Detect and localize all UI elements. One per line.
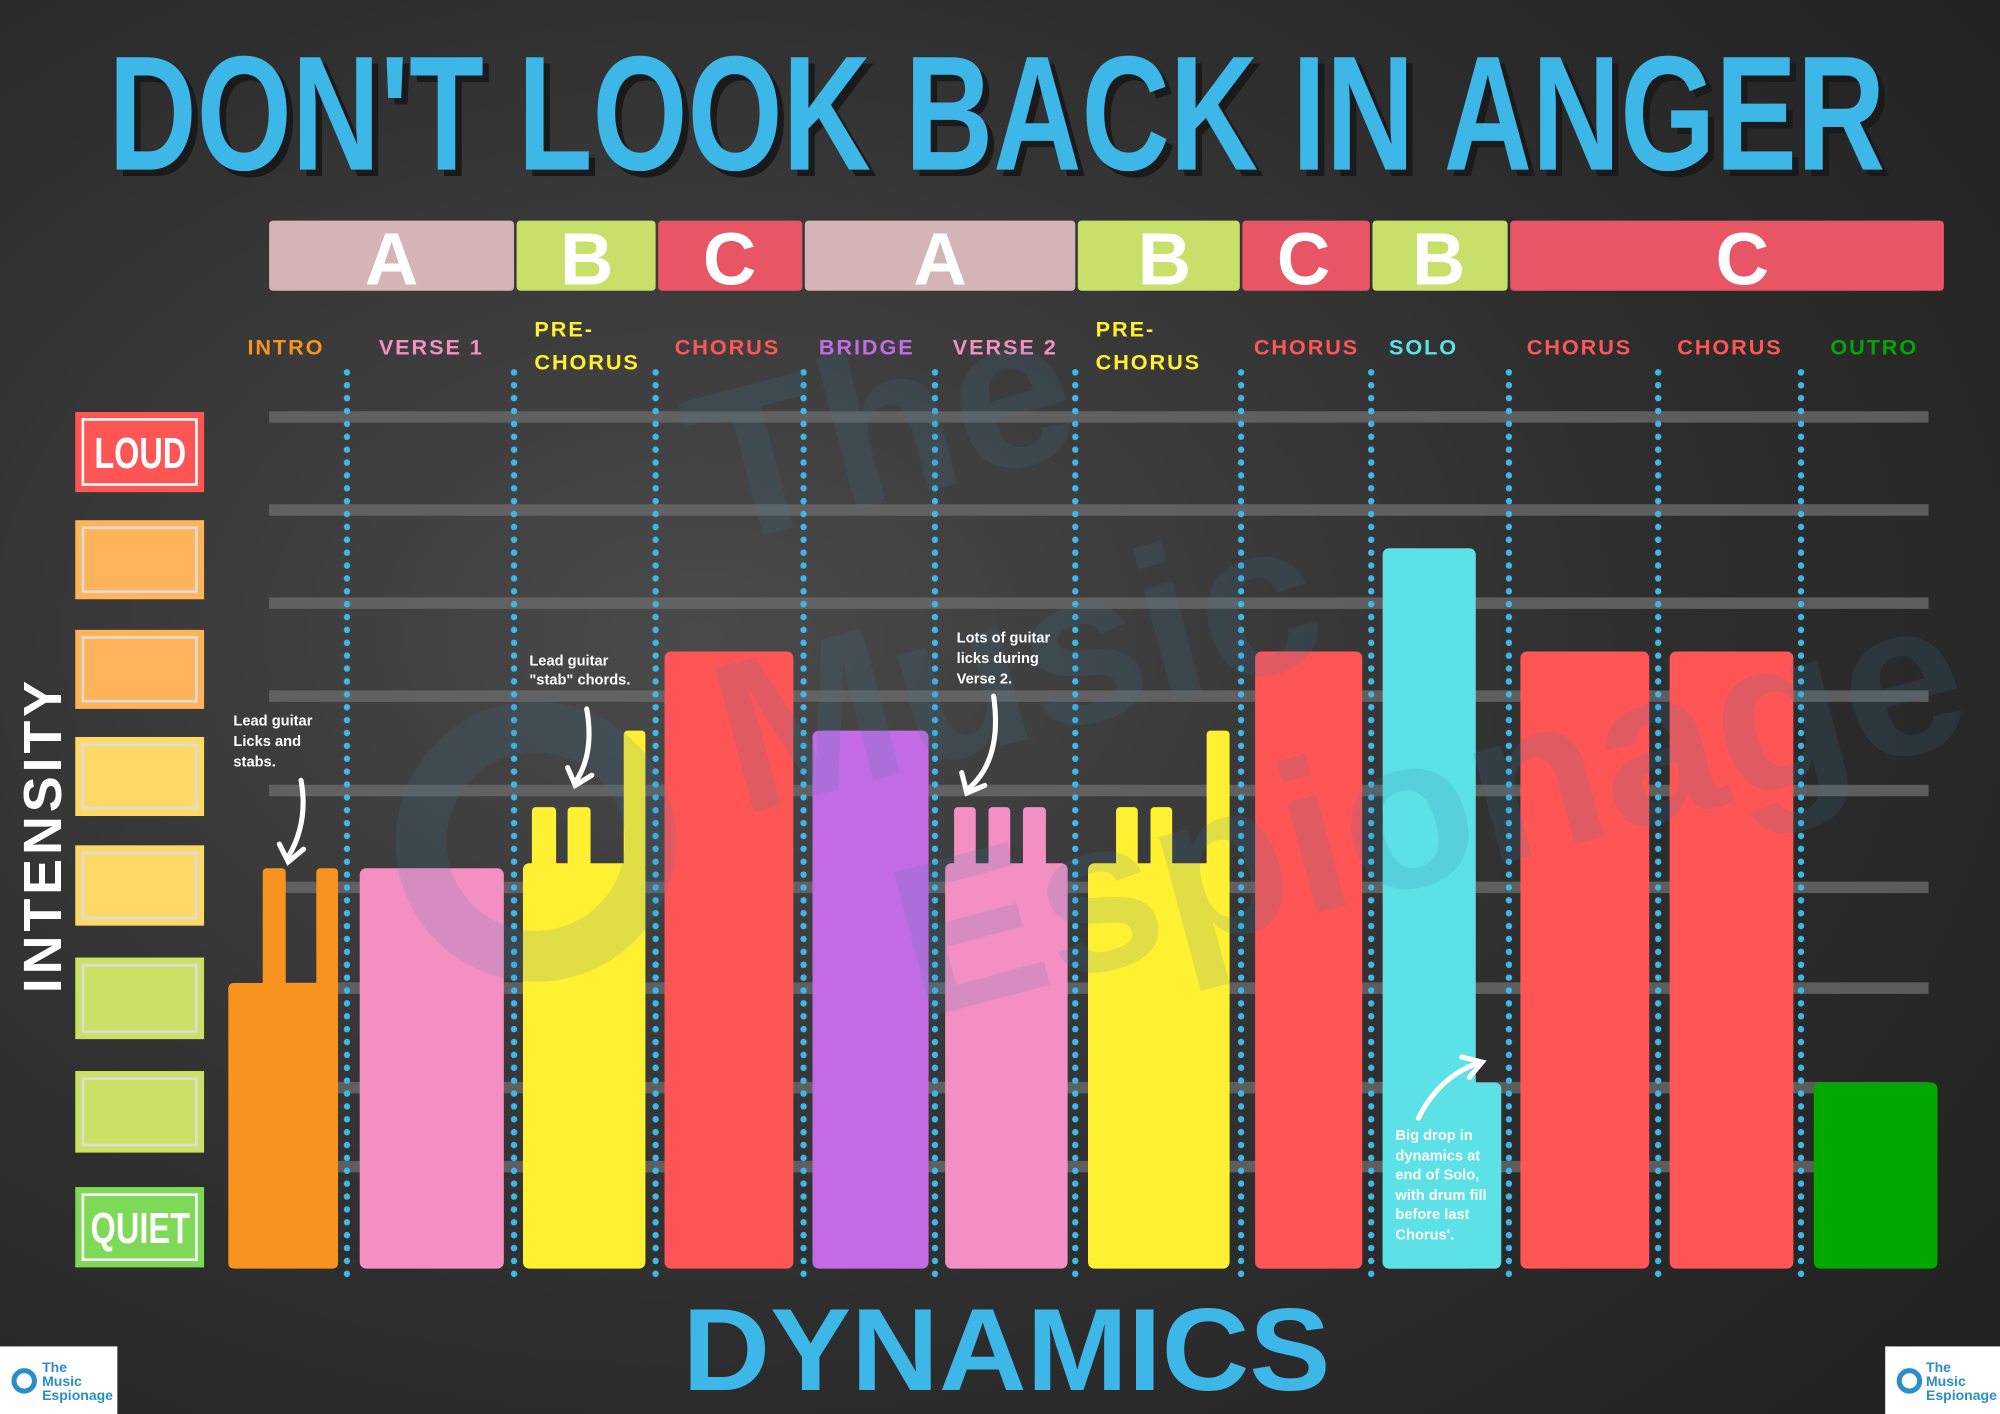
- bar: solo: [1383, 548, 1501, 1269]
- annotation: pre-chorus: Lead guitar: [529, 654, 609, 670]
- annotation: solo: dynamics at: [1395, 1148, 1480, 1164]
- logo right: [1885, 1346, 2000, 1414]
- scale: loud: LOUD: [94, 430, 186, 478]
- song structure letter bar: A: [365, 217, 418, 300]
- annotation: solo: with drum fill: [1394, 1188, 1487, 1204]
- watermark: Music: [689, 468, 1345, 860]
- bar: verse 1: [360, 868, 504, 1269]
- annotation: verse 2: licks during: [957, 651, 1039, 667]
- bar: bridge: [812, 731, 929, 1269]
- section labels: OUTRO: [1830, 334, 1918, 359]
- annotation: intro: [233, 713, 313, 862]
- song structure letter bar: C: [1277, 217, 1330, 300]
- section labels: CHORUS: [534, 350, 640, 375]
- axis label: intensity: INTENSITY: [14, 677, 73, 993]
- section labels: CHORUS: [1527, 334, 1632, 359]
- song structure letter bar: B: [1138, 217, 1191, 300]
- song structure letter bar: B: [1412, 217, 1465, 300]
- annotation: intro: stabs.: [233, 754, 276, 770]
- bar: chorus 2: [1255, 652, 1362, 1269]
- section labels: [247, 317, 1918, 375]
- section labels: VERSE 1: [379, 334, 484, 359]
- bar: verse 2: [945, 807, 1068, 1269]
- section labels: CHORUS: [1096, 350, 1201, 375]
- annotation: solo: [1394, 1057, 1487, 1243]
- bar: chorus 4: [1670, 652, 1793, 1269]
- bar: pre-chorus 1: [523, 731, 645, 1269]
- song structure letter bar: A: [913, 217, 967, 300]
- bar chart: dynamics: [228, 548, 1938, 1269]
- song structure letter bar: C: [703, 217, 756, 300]
- annotation: solo: Chorus'.: [1395, 1227, 1454, 1243]
- bar: chorus 1: [665, 652, 793, 1269]
- grid lines: [269, 417, 1929, 1167]
- song structure letter bar: B: [560, 217, 613, 300]
- scale: loud: [75, 412, 204, 492]
- logo right: Espionage: [1926, 1387, 1997, 1403]
- intensity scale: [75, 412, 204, 1267]
- section labels: CHORUS: [1254, 334, 1359, 359]
- logo left: Espionage: [42, 1387, 113, 1403]
- section labels: CHORUS: [675, 334, 780, 359]
- scale: quiet: QUIET: [91, 1205, 190, 1253]
- annotation: intro: Lead guitar: [233, 713, 313, 729]
- logo left: Music: [42, 1373, 82, 1389]
- bar: intro: [228, 868, 338, 1269]
- section labels: BRIDGE: [819, 334, 915, 359]
- section labels: CHORUS: [1677, 334, 1783, 359]
- watermark: [421, 259, 1989, 1064]
- annotation: intro: Licks and: [233, 734, 301, 750]
- section labels: PRE-: [534, 317, 594, 342]
- bar: chorus 3: [1520, 652, 1649, 1269]
- annotation: verse 2: [957, 631, 1051, 793]
- song structure letter bar: [269, 217, 1944, 300]
- annotation: verse 2: Lots of guitar: [957, 631, 1051, 647]
- song structure letter bar: C: [1716, 217, 1769, 300]
- logo left: The: [42, 1359, 67, 1375]
- annotation: solo: before last: [1395, 1207, 1470, 1223]
- axis label: dynamics: DYNAMICS: [682, 1284, 1330, 1414]
- scale: quiet: [75, 1187, 204, 1267]
- annotation: pre-chorus: [529, 654, 630, 785]
- logo right: The: [1926, 1359, 1951, 1375]
- bar: pre-chorus 2: [1088, 731, 1230, 1269]
- logo right: Music: [1926, 1373, 1966, 1389]
- annotation: solo: end of Solo,: [1395, 1167, 1479, 1183]
- annotation: solo: Big drop in: [1395, 1128, 1473, 1144]
- annotation: pre-chorus: "stab" chords.: [529, 673, 630, 689]
- section labels: VERSE 2: [953, 334, 1058, 359]
- bar: outro: [1814, 1082, 1938, 1269]
- watermark: The: [664, 259, 1099, 593]
- section labels: INTRO: [247, 334, 324, 359]
- logo left: [0, 1346, 117, 1414]
- section labels: SOLO: [1389, 334, 1458, 359]
- annotation: verse 2: Verse 2.: [957, 671, 1012, 687]
- section labels: PRE-: [1096, 317, 1155, 342]
- dotted section dividers: [347, 372, 1801, 1275]
- watermark: Espionage: [868, 547, 1989, 1064]
